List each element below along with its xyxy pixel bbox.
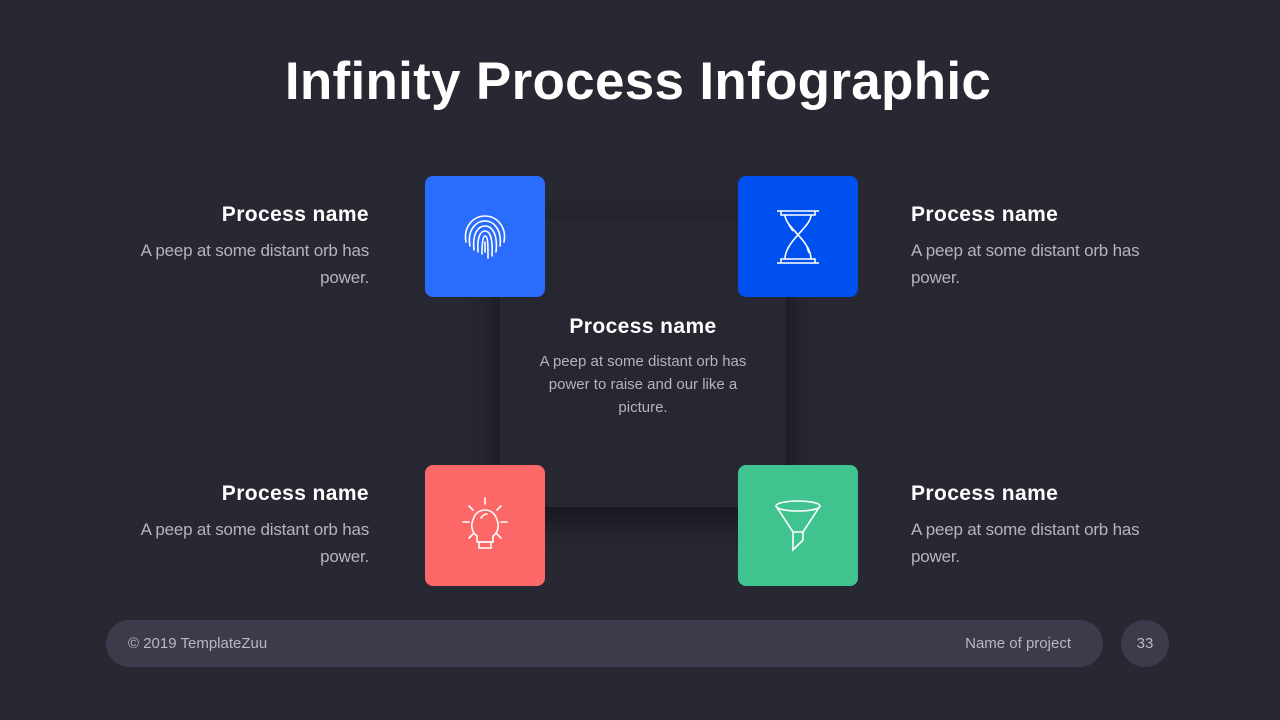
text: bottom right: A peep at some distant orb has power.	[911, 520, 1139, 566]
text: top left	[140, 203, 369, 287]
text: top right	[911, 203, 1139, 287]
page number: 33	[1137, 635, 1153, 652]
text: top right: Process name	[911, 203, 1058, 226]
icon: hourglass	[738, 176, 858, 297]
text: top right: A peep at some distant orb has power.	[911, 241, 1139, 287]
text: bottom right	[911, 482, 1139, 566]
text: top left: Process name	[222, 203, 369, 226]
center text: A peep at some distant orb has power to raise and our like a picture.	[540, 353, 746, 416]
icon: fingerprint	[425, 176, 545, 297]
icon: funnel	[738, 465, 858, 586]
text: bottom right: Process name	[911, 482, 1058, 505]
title: Infinity Process Infographic	[285, 52, 991, 111]
text: bottom left: A peep at some distant orb has power.	[141, 520, 369, 566]
center heading: Process name	[569, 315, 717, 338]
icon: lightbulb	[425, 465, 545, 586]
center panel	[500, 220, 786, 507]
footer project: Name of project	[965, 635, 1071, 652]
footer bar	[106, 620, 1103, 667]
footer copyright: © 2019 TemplateZuu	[128, 635, 267, 652]
text: bottom left: Process name	[222, 482, 369, 505]
text: top left: A peep at some distant orb has power.	[141, 241, 369, 287]
text: bottom left	[140, 482, 369, 566]
page number	[1121, 620, 1169, 667]
